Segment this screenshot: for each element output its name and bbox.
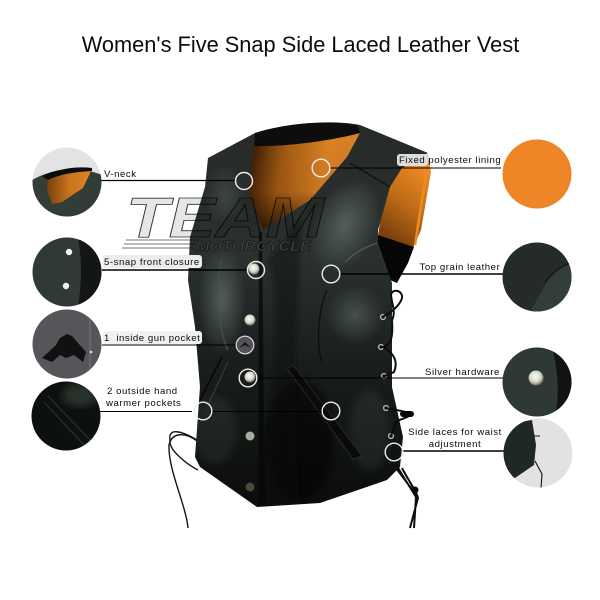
lace toggle — [400, 411, 414, 417]
dark inner back — [378, 235, 414, 283]
left pocket stitch — [208, 362, 228, 405]
thumbnail: gun pocket — [32, 309, 102, 379]
callout: side laces: adjustment — [429, 439, 481, 450]
back lining, right side — [378, 155, 431, 248]
seams — [218, 163, 390, 362]
callout: hand warmer pockets — [31, 381, 340, 451]
title: Women's Five Snap Side Laced Leather Vest — [82, 32, 519, 57]
right pocket welt — [287, 366, 362, 459]
callout: top grain leather — [322, 242, 572, 312]
side lace knot — [412, 486, 418, 494]
callout: fixed polyester lining: Fixed polyester lining — [399, 155, 501, 166]
side laces — [383, 291, 418, 528]
side eyelets — [379, 315, 393, 438]
collar inside — [254, 123, 360, 146]
thumbnail: pocket — [31, 381, 101, 451]
vest illustration — [169, 122, 431, 528]
callout: hand warmer pockets: warmer pockets — [105, 398, 181, 409]
leather body — [188, 122, 428, 507]
callout: side laces: Side laces for waist — [408, 427, 502, 438]
watermark subtitle: MOTORCYCLE — [196, 238, 312, 255]
left pocket slit — [200, 357, 222, 400]
callout: fixed polyester lining — [312, 140, 572, 208]
thumbnail: snap closure — [32, 237, 102, 307]
thumbnail: leather — [502, 242, 572, 312]
callout: silver hardware — [239, 347, 572, 417]
callout: 5-snap front closure — [32, 237, 264, 307]
lining trim stitching — [415, 162, 428, 245]
watermark logo: TEAM — [126, 186, 326, 250]
left lace — [169, 432, 198, 528]
thumbnail: silver snap — [502, 347, 572, 417]
callout: V-neck — [32, 147, 252, 217]
thumbnail: V-neck — [32, 147, 102, 217]
callout: top grain leather: Top grain leather — [420, 262, 501, 273]
callout: inside gun pocket — [32, 309, 254, 379]
callout: side laces — [385, 418, 573, 488]
callout: inside gun pocket: 1 inside gun pocket — [104, 333, 200, 344]
thumbnail: orange lining — [502, 140, 572, 208]
thumbnail: side laces — [503, 418, 573, 488]
callout: 5-snap front closure: 5-snap front closure — [104, 257, 200, 268]
callout: V-neck: V-neck — [104, 169, 137, 180]
placket shadow — [258, 232, 265, 507]
lining shadow — [249, 133, 360, 230]
callout: silver hardware: Silver hardware — [425, 367, 500, 378]
front snaps — [248, 264, 260, 274]
V-neck lining — [249, 133, 360, 230]
leather highlights — [193, 165, 395, 507]
callout: hand warmer pockets: 2 outside hand — [107, 386, 178, 397]
